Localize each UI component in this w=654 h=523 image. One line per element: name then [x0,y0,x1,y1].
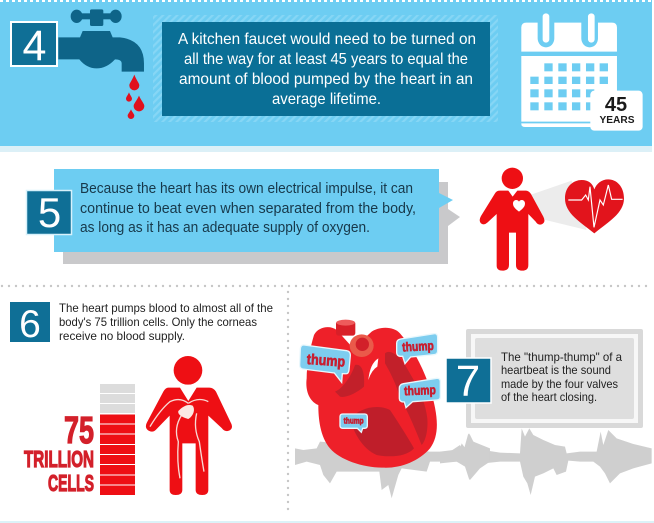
icon: person with heartbeat heart [480,168,624,271]
illustration: anatomical heart [306,320,437,468]
speech bubbles: thump [300,334,440,432]
label: 75 trillion cells: TRILLION [24,446,94,472]
text block: fact 5 [80,180,416,236]
number badge 4 [11,22,57,70]
speech bubbles: thump: thump [402,339,434,354]
icon: person with circulatory system [146,356,232,495]
speech bubbles: thump: thump [344,416,364,425]
callout: faucet fact: all the way for at least 45 years to equal the [184,51,468,68]
speech bubbles: thump: thump [404,383,436,398]
callout: thump text panel [446,329,643,428]
number badge 5 [26,189,72,236]
number badge 6 [10,302,50,346]
text block: fact 7 [501,350,622,404]
text block: fact 6: body's 75 trillion cells. Only the corneas [59,315,257,329]
callout: faucet fact: average lifetime. [272,91,381,108]
number badge 7 [446,357,491,406]
callout: faucet fact: amount of blood pumped by the heart in an [179,71,473,88]
icon: calendar 45 years: YEARS [600,115,635,126]
label: 75 trillion cells: CELLS [48,470,94,496]
icon: faucet with blood drops [58,9,144,119]
text block: fact 7: heartbeat is the sound [501,363,611,377]
panel: fact 7 thump [295,320,652,498]
callout: faucet fact [153,15,498,122]
icon: calendar 45 years: 45 [605,94,627,116]
callout: faucet fact: A kitchen faucet would need to be turned on [178,31,476,48]
label: 75 trillion cells: 75 [64,410,94,452]
text block: fact 6: The heart pumps blood to almost all of the [59,301,273,315]
sound waveform [295,428,652,498]
icon: calendar 45 years [521,17,643,131]
number badge 6: 6 [19,303,41,346]
text block: fact 7: made by the four valves [501,377,618,391]
bar chart: 75 trillion [100,384,135,495]
panel: fact 4 faucet [0,0,652,152]
text block: fact 6: receive no blood supply. [59,329,185,343]
number badge 5: 5 [38,189,61,236]
text block: fact 5: Because the heart has its own electrical impulse, it can [80,180,413,197]
text block: fact 5: continue to beat even when separated from the body, [80,200,416,217]
text block: fact 5: as long as it has an adequate supply of oxygen. [80,219,370,236]
panel: fact 6 trillion cells [10,301,273,496]
number badge 7: 7 [456,357,480,406]
text block: fact 6 [59,301,273,343]
text block: fact 7: The "thump-thump" of a [501,350,622,364]
panel: fact 5 electrical impulse [26,169,460,264]
dotted dividers [2,286,652,510]
label: 75 trillion cells [24,410,94,496]
text block: fact 7: of the heart closing. [501,390,597,404]
speech bubbles: thump: thump [306,352,346,371]
number badge 4: 4 [23,22,46,70]
